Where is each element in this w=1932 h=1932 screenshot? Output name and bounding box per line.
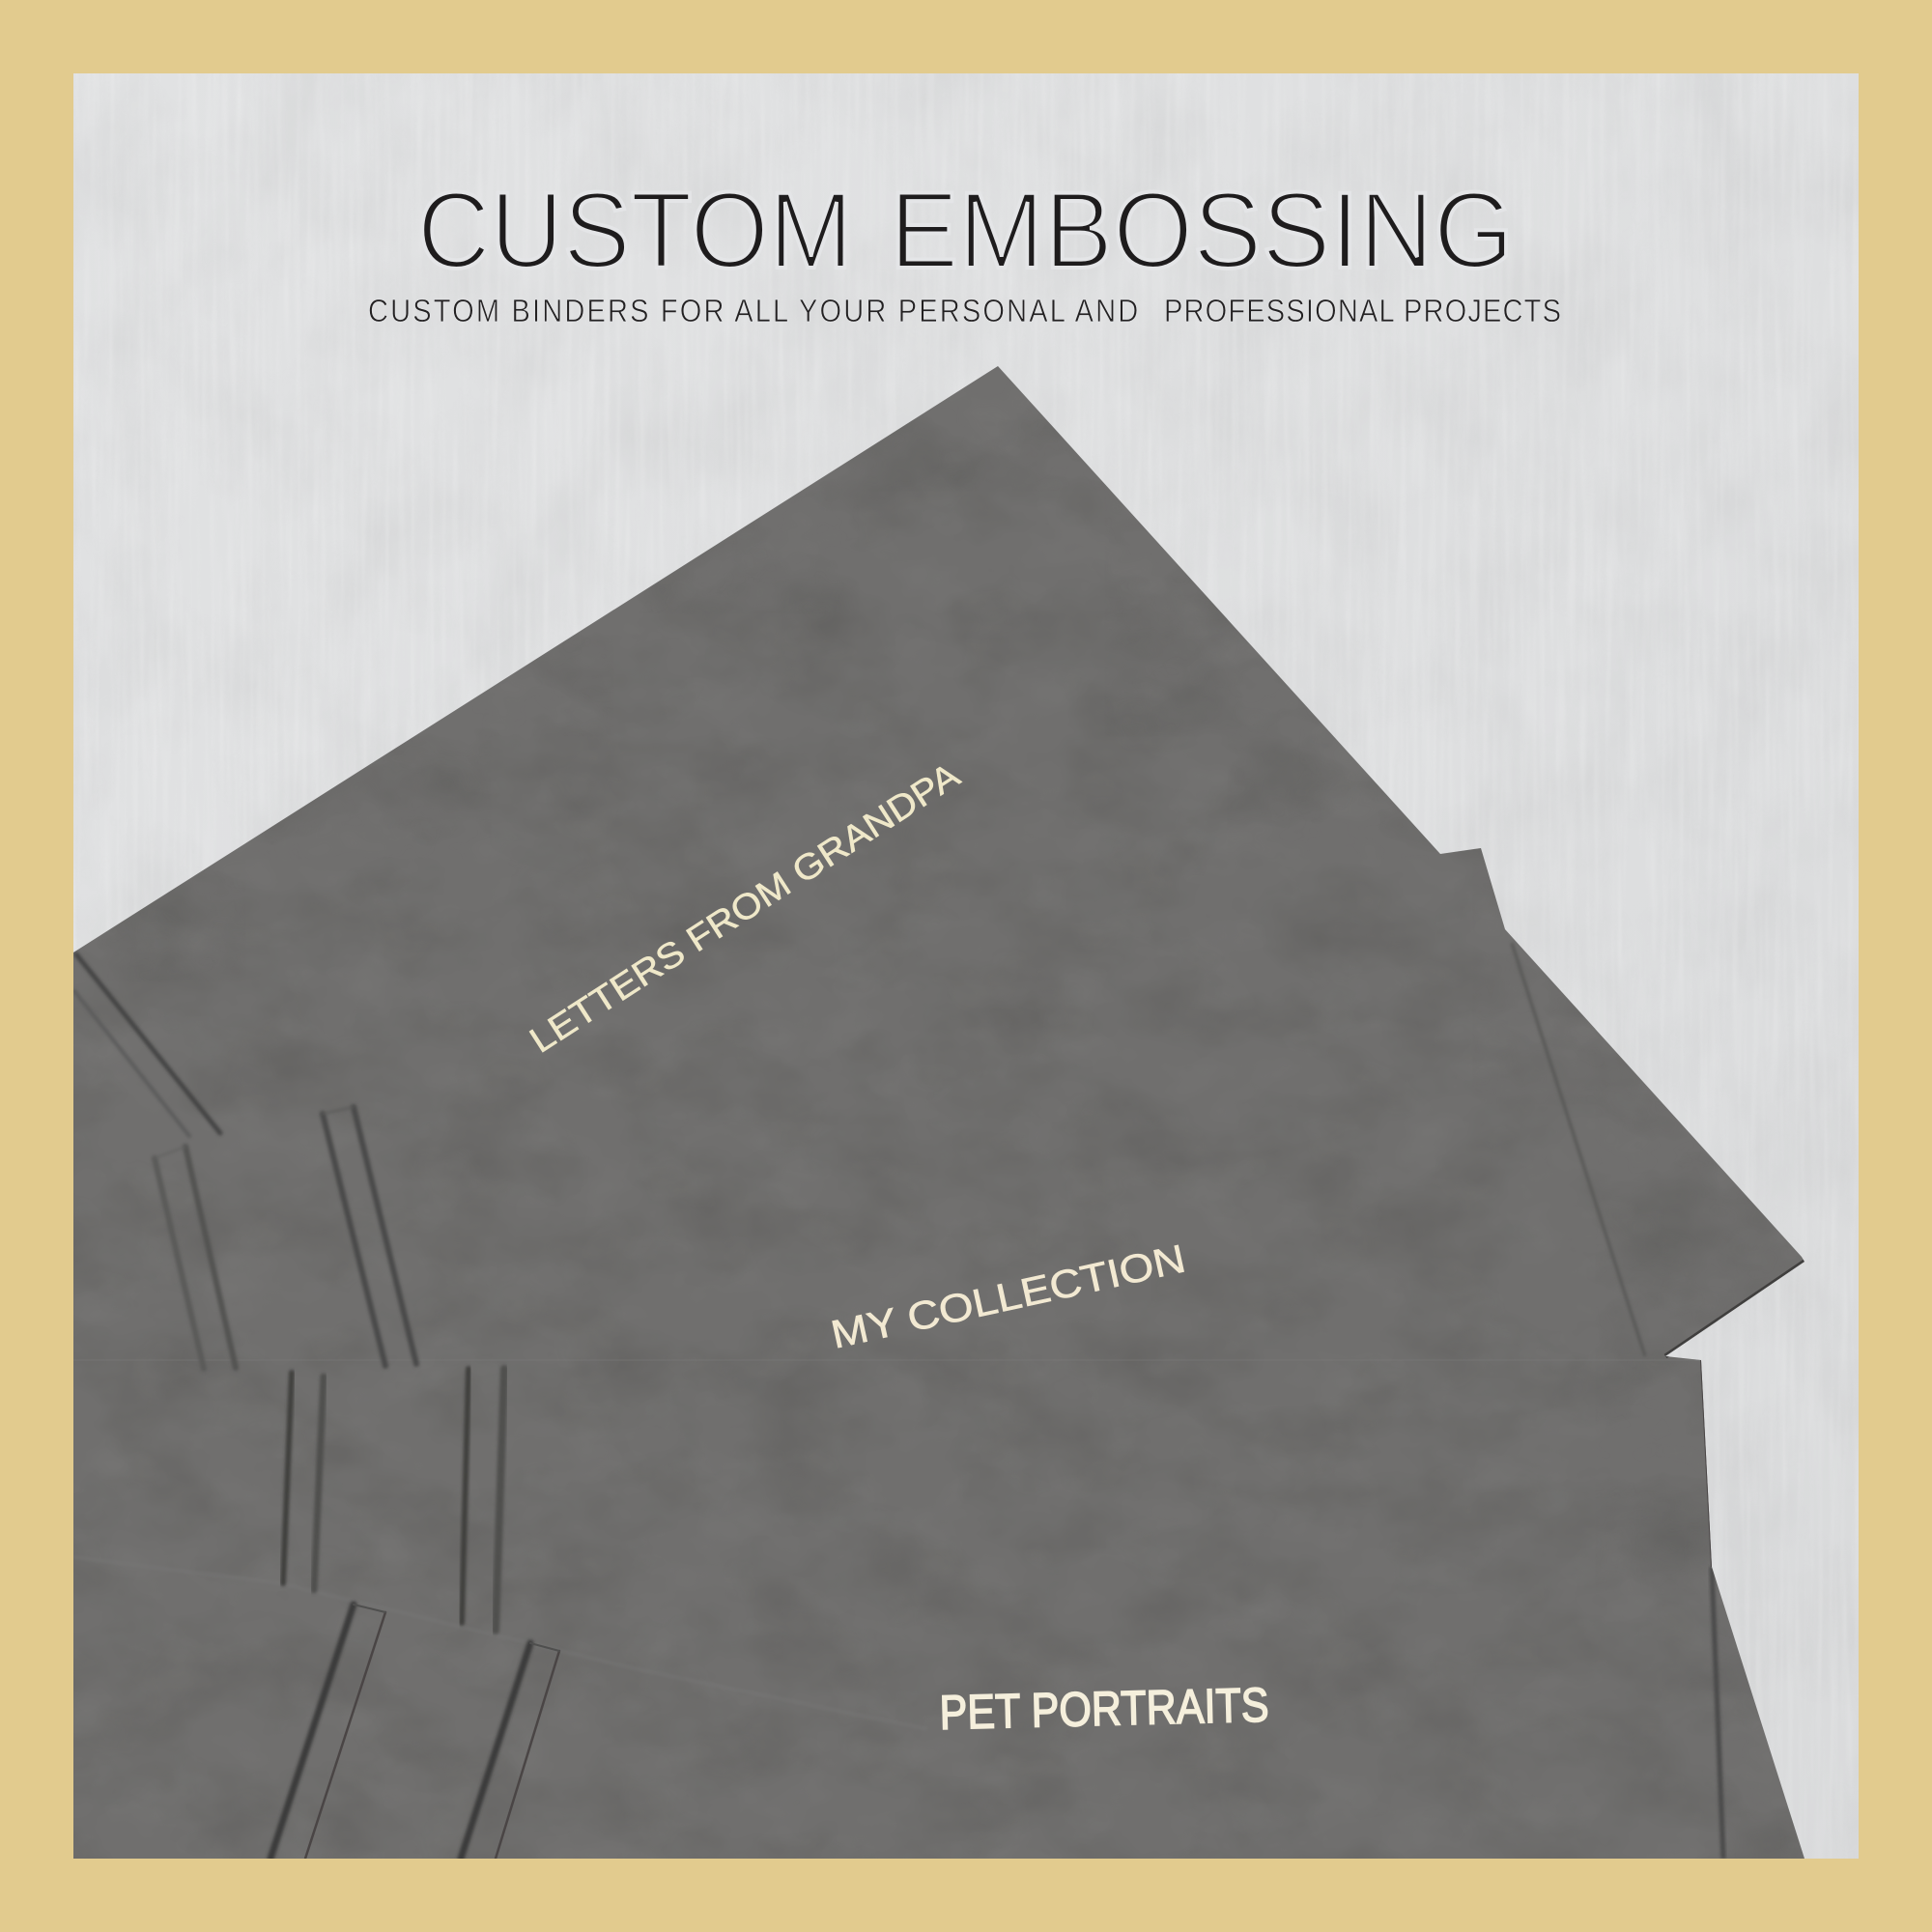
groove: bottom binder left <box>270 1605 385 1859</box>
stack of grey binders <box>73 357 1812 1864</box>
subtitle part two: PROFESSIONAL PROJECTS <box>1164 293 1563 328</box>
groove: top binder upper <box>74 954 220 1136</box>
title word: embossing: EMBOSSING <box>890 170 1514 291</box>
title <box>417 170 1514 291</box>
groove: middle binder left <box>155 1147 236 1369</box>
subtitle <box>368 293 1563 328</box>
groove: bottom binder right <box>461 1643 559 1859</box>
binder edges <box>941 943 1804 1859</box>
subtitle part one: CUSTOM BINDERS FOR ALL YOUR PERSONAL AND <box>368 293 1140 328</box>
foil text: pet portraits: PET PORTRAITS <box>939 1678 1269 1740</box>
title word: custom: CUSTOM <box>417 170 853 291</box>
spine grooves <box>74 954 559 1859</box>
foil text: letters from grandpa: LETTERS FROM GRANDPA <box>523 754 967 1061</box>
groove: lower binder right <box>462 1369 504 1631</box>
groove: lower binder left <box>283 1373 324 1590</box>
groove: middle binder right <box>323 1107 416 1366</box>
foil text: my collection: MY COLLECTION <box>827 1236 1189 1357</box>
